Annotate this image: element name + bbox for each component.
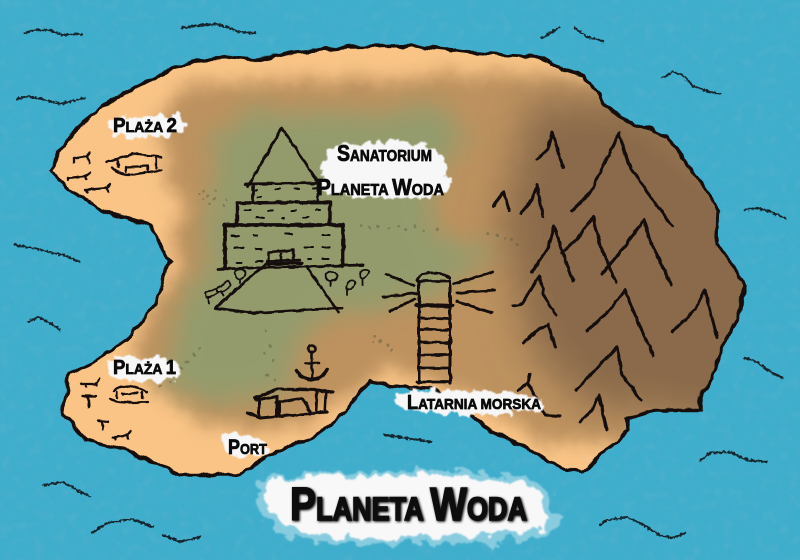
title: Planeta Woda: PLANETA WODA bbox=[290, 478, 527, 530]
label: Sanatorium Planeta Woda bbox=[317, 140, 452, 200]
title: Planeta Woda bbox=[255, 471, 557, 544]
label: Port: PORT bbox=[228, 436, 267, 459]
speckled ground marks bbox=[158, 189, 517, 388]
icon: beach 2 hut and loungers bbox=[68, 152, 162, 192]
icon: lighthouse bbox=[383, 272, 495, 383]
label: Plaża 2: PLAŻA 2 bbox=[113, 115, 177, 137]
island bbox=[49, 43, 747, 478]
icon: anchor bbox=[296, 346, 327, 380]
icon: mountains bbox=[493, 132, 717, 430]
label: Sanatorium Planeta Woda: PLANETA WODA bbox=[317, 174, 444, 200]
icon: beach 1 hut and loungers bbox=[81, 379, 148, 439]
icon: port warehouse bbox=[247, 389, 333, 418]
island coastline bbox=[50, 46, 745, 475]
label: Plaża 1: PLAŻA 1 bbox=[113, 357, 176, 379]
island terrain bbox=[52, 46, 744, 474]
label: Latarnia morska: LATARNIA MORSKA bbox=[407, 392, 541, 414]
icon: sanatorium building bbox=[205, 128, 369, 313]
label: Sanatorium Planeta Woda: SANATORIUM bbox=[337, 140, 432, 166]
